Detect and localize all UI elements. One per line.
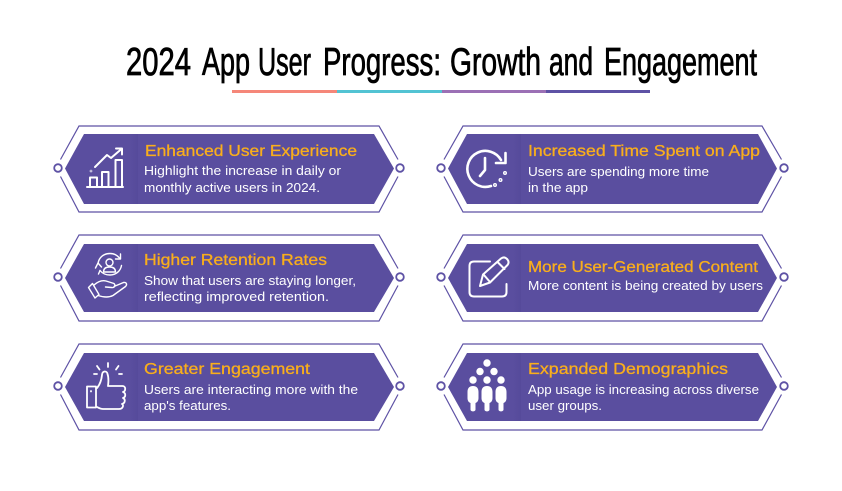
text block (528, 382, 759, 413)
heading: Greater Engagement (144, 361, 311, 378)
heading: Expanded Demographics (528, 361, 728, 378)
title: and (549, 41, 593, 84)
text block (144, 273, 356, 304)
text block: in the app (528, 180, 588, 195)
heading: Increased Time Spent on App (528, 143, 760, 160)
title: App (202, 41, 250, 84)
text block (144, 163, 342, 195)
text block: app's features. (144, 398, 231, 413)
panel: greater engagement (54, 344, 404, 430)
text block: Users are spending more time (528, 164, 709, 179)
title: User (258, 41, 311, 84)
text block: user groups. (528, 398, 602, 413)
title: Progress: (323, 41, 441, 84)
text block (528, 164, 709, 195)
text block: More content is being created by users (528, 278, 764, 293)
panel: more user-generated content (437, 235, 788, 321)
text block (144, 382, 358, 413)
text block: App usage is increasing across diverse (528, 382, 759, 397)
text block: monthly active users in 2024. (144, 180, 320, 195)
heading: Higher Retention Rates (144, 252, 327, 269)
title: Growth (450, 41, 541, 84)
icon: pencil on square (470, 257, 509, 296)
icon: rising bar chart (87, 148, 123, 187)
icon: clock with arrow (467, 151, 506, 187)
text block: Show that users are staying longer, (144, 273, 356, 288)
heading: More User-Generated Content (528, 259, 759, 276)
text block: reflecting improved retention. (144, 289, 329, 304)
title: 2024 (126, 41, 191, 84)
panel: higher retention rates (54, 235, 404, 321)
icon: hand holding user (88, 254, 127, 298)
icon: thumbs up (87, 363, 125, 409)
text block: Highlight the increase in daily or (144, 163, 342, 178)
panel: expanded demographics (437, 344, 788, 430)
text block: Users are interacting more with the (144, 382, 358, 397)
title underline (232, 90, 650, 93)
icon: group of people (468, 359, 506, 411)
title: Engagement (604, 41, 757, 84)
panel: increased time spent on app (437, 126, 788, 212)
heading: Enhanced User Experience (145, 143, 357, 160)
panel: enhanced user experience (54, 126, 404, 212)
title (126, 41, 757, 84)
